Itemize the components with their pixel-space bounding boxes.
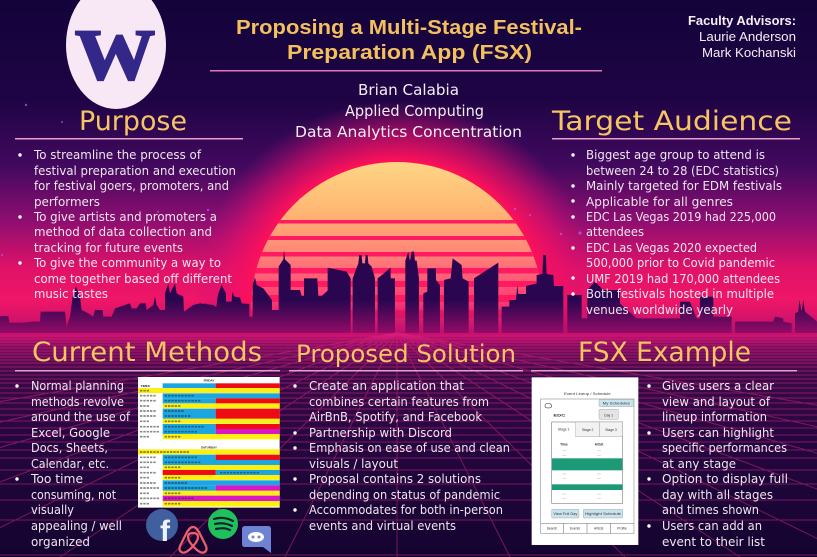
text: purpose bullets: To give the community a way to [33, 256, 221, 271]
icon: Facebook [146, 509, 178, 548]
text: purpose bullets [18, 148, 236, 302]
text: target audience bullets: Both festivals hosted in multiple [586, 287, 774, 302]
text: FSX example bullets: Users can add an [662, 519, 762, 534]
text: current methods bullets: Excel, Google [31, 426, 110, 441]
text: FSX example bullets: day with all stages [662, 488, 773, 503]
background: grid floor [0, 333, 817, 557]
text: FSX example bullets: lineup information [662, 410, 767, 425]
text: proposed solution bullets: depending on status of pandemic [309, 488, 500, 503]
app mockup: FSX schedule screen: Event Lineup / Schedule [564, 392, 611, 396]
text: purpose bullets: To streamline the process of [33, 148, 201, 163]
faculty advisors: Mark Kochanski [702, 45, 796, 60]
text: proposed solution bullets: Proposal contains 2 solutions [309, 472, 481, 487]
background: stars [1, 104, 582, 256]
title: Proposing a Multi-Stage Festival- [236, 17, 582, 39]
faculty advisors: Faculty Advisors: [688, 13, 796, 28]
app mockup: FSX schedule screen: EDC [553, 414, 566, 418]
app mockup: FSX schedule screen: Day 1 [604, 413, 613, 417]
app mockup: FSX schedule screen: Stage 2 [582, 428, 594, 432]
author block: Brian Calabia [358, 81, 459, 99]
text: purpose bullets: music tastes [34, 287, 108, 302]
app mockup: FSX schedule screen: Search [547, 527, 557, 531]
text: target audience bullets: Biggest age group to attend is [586, 148, 765, 163]
app mockup: FSX schedule screen: Events [570, 527, 580, 531]
text: target audience bullets: UMF 2019 had 170,000 attendees [586, 272, 780, 287]
text: purpose bullets: festival preparation and execution [34, 164, 236, 179]
text: proposed solution bullets: AirBnB, Spotify, and Facebook [309, 410, 483, 425]
faculty advisors [688, 13, 796, 60]
background: skyline base glow [0, 300, 817, 335]
icon: Discord [242, 526, 271, 553]
text: proposed solution bullets: Partnership with Discord [309, 426, 452, 441]
app mockup: FSX schedule screen: View Full Day [553, 512, 578, 516]
schedule table image: SATURDAY [201, 445, 217, 449]
text: proposed solution bullets: combines certain features from [309, 395, 489, 410]
title [210, 17, 602, 72]
text: purpose bullets: come together based off different [34, 272, 232, 287]
text: current methods bullets: appealing / well [31, 519, 122, 534]
heading: Proposed Solution: Proposed Solution [296, 340, 516, 368]
background: synthwave sky [0, 0, 817, 335]
text: target audience bullets: EDC Las Vegas 2020 expected [586, 241, 757, 256]
app mockup: FSX schedule screen [532, 377, 638, 545]
heading: FSX Example: FSX Example [578, 337, 751, 368]
heading: Purpose: Purpose [79, 106, 187, 137]
text: current methods bullets: organized [31, 535, 90, 550]
app mockup: FSX schedule screen: Time [560, 442, 568, 446]
text: proposed solution bullets: Emphasis on ease of use and clean [309, 441, 510, 456]
text: purpose bullets: tracking for future events [34, 241, 183, 256]
text: current methods bullets: Too time [30, 472, 83, 487]
text: proposed solution bullets: Accommodates for both in-person [309, 503, 503, 518]
text: current methods bullets: visually [31, 503, 74, 518]
text: purpose bullets: performers [34, 195, 100, 210]
text: target audience bullets: attendees [586, 225, 644, 240]
app mockup: FSX schedule screen: Artists [594, 527, 604, 531]
text: current methods bullets: Docs, Sheets, [31, 441, 108, 456]
app mockup: FSX schedule screen: Highlight Schedule [585, 512, 621, 516]
icon: Spotify [208, 509, 238, 539]
author block [295, 81, 522, 141]
heading: Current Methods: Current Methods [32, 337, 262, 368]
app mockup: FSX schedule screen: Stage 3 [605, 428, 617, 432]
title: Preparation App (FSX) [287, 42, 532, 64]
author block: Applied Computing [345, 102, 484, 120]
text: target audience bullets: 500,000 prior to Covid pandemic [586, 256, 775, 271]
app mockup: FSX schedule screen: My Schedules [603, 402, 630, 406]
text: FSX example bullets: Gives users a clear [662, 379, 775, 394]
app mockup: FSX schedule screen: Stage 1 [558, 427, 570, 431]
text: current methods bullets: Normal planning [31, 379, 124, 394]
text: target audience bullets [571, 148, 782, 318]
text: target audience bullets: Applicable for all genres [586, 195, 733, 210]
text: FSX example bullets: view and layout of [662, 395, 770, 410]
text: FSX example bullets: at any stage [662, 457, 736, 472]
text: FSX example bullets: and times shown [662, 503, 759, 518]
text: target audience bullets: EDC Las Vegas 2019 had 225,000 [586, 210, 776, 225]
text: current methods bullets: Calendar, etc. [31, 457, 109, 472]
text: target audience bullets: Mainly targeted for EDM festivals [586, 179, 782, 194]
text: FSX example bullets [647, 379, 788, 550]
heading: Target Audience: Target Audience [551, 106, 792, 137]
text: purpose bullets: method of data collection and [34, 225, 212, 240]
background: sun glow [208, 103, 586, 316]
text: FSX example bullets: Users can highlight [662, 426, 774, 441]
text: current methods bullets [15, 379, 130, 550]
icon: Airbnb [179, 527, 207, 553]
text: target audience bullets: venues worldwide yearly [586, 303, 733, 318]
text: FSX example bullets: Option to display full [662, 472, 788, 487]
text: FSX example bullets: specific performances [662, 441, 787, 456]
icon: Facebook: f [160, 515, 171, 548]
text: FSX example bullets: event to their list [662, 535, 765, 550]
schedule table image: TIMES [141, 384, 150, 388]
text: proposed solution bullets: Create an application that [309, 379, 464, 394]
schedule table image [138, 377, 280, 508]
background: city skyline [0, 250, 817, 337]
text: target audience bullets: between 24 to 28 (EDC statistics) [586, 164, 779, 179]
text: proposed solution bullets: visuals / layout [309, 457, 398, 472]
background: sun with stripes [251, 162, 539, 328]
text: current methods bullets: consuming, not [31, 488, 116, 503]
text: proposed solution bullets: events and virtual events [309, 519, 456, 534]
text: current methods bullets: around the use of [31, 410, 130, 425]
text: purpose bullets: for festival goers, promoters, and [34, 179, 229, 194]
text: current methods bullets: methods revolve [31, 395, 124, 410]
logo: University of Washington W [66, 0, 166, 109]
app mockup: FSX schedule screen: Artist [595, 442, 604, 446]
faculty advisors: Laurie Anderson [699, 29, 796, 44]
text: proposed solution bullets [293, 379, 510, 534]
logo: University of Washington W: W [75, 15, 155, 95]
author block: Data Analytics Concentration [295, 123, 522, 141]
app mockup: FSX schedule screen: Profile [617, 527, 627, 531]
text: purpose bullets: To give artists and promoters a [33, 210, 217, 225]
schedule table image: FRIDAY [204, 379, 214, 383]
